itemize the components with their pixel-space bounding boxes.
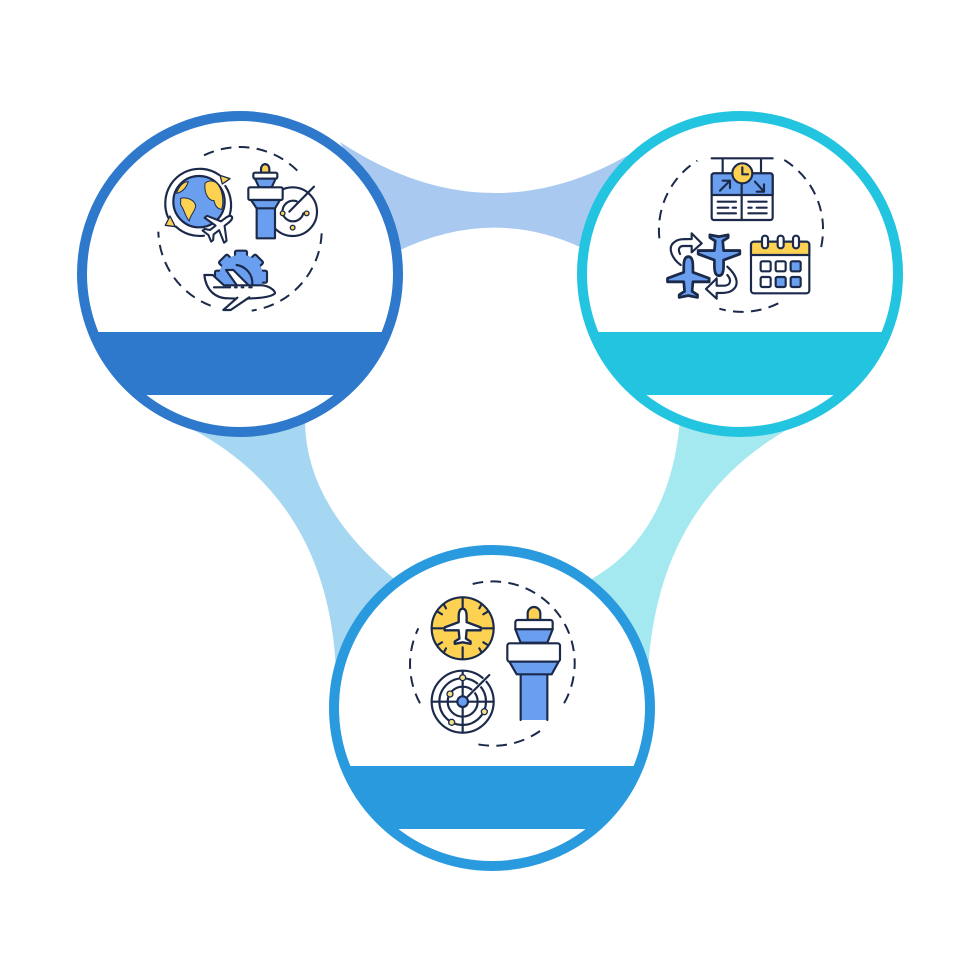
icon: rerouting planes <box>667 233 740 299</box>
icon: control tower <box>248 164 283 238</box>
connector: left <box>190 420 398 672</box>
dashed ring <box>659 160 823 312</box>
icon: global air operations <box>158 147 322 311</box>
connector: top <box>340 142 640 252</box>
panel: top right circle <box>577 116 903 432</box>
ring: bottom <box>334 550 650 866</box>
icon: plane <box>197 204 242 249</box>
band: bottom <box>350 766 634 829</box>
icon: calendar <box>751 236 809 293</box>
icon: compass with plane <box>432 597 494 659</box>
icon: gear and airliner <box>204 251 275 310</box>
icon: control tower <box>507 607 560 720</box>
panel: top left circle <box>77 116 403 432</box>
connector: right <box>586 420 790 672</box>
icon: radar small <box>268 187 317 236</box>
icon: flight scheduling <box>659 158 823 312</box>
band: top right <box>598 332 882 395</box>
band: top left <box>98 332 382 395</box>
dashed ring <box>158 147 322 311</box>
icon: departure board <box>712 158 773 220</box>
icon: air traffic control <box>410 581 575 746</box>
ring: top left <box>82 116 398 432</box>
icon: radar <box>432 671 494 733</box>
panel: bottom circle <box>329 550 655 866</box>
ring: top right <box>582 116 898 432</box>
dashed ring <box>410 581 575 746</box>
icon: globe <box>165 169 242 249</box>
icon: clock <box>732 163 752 183</box>
